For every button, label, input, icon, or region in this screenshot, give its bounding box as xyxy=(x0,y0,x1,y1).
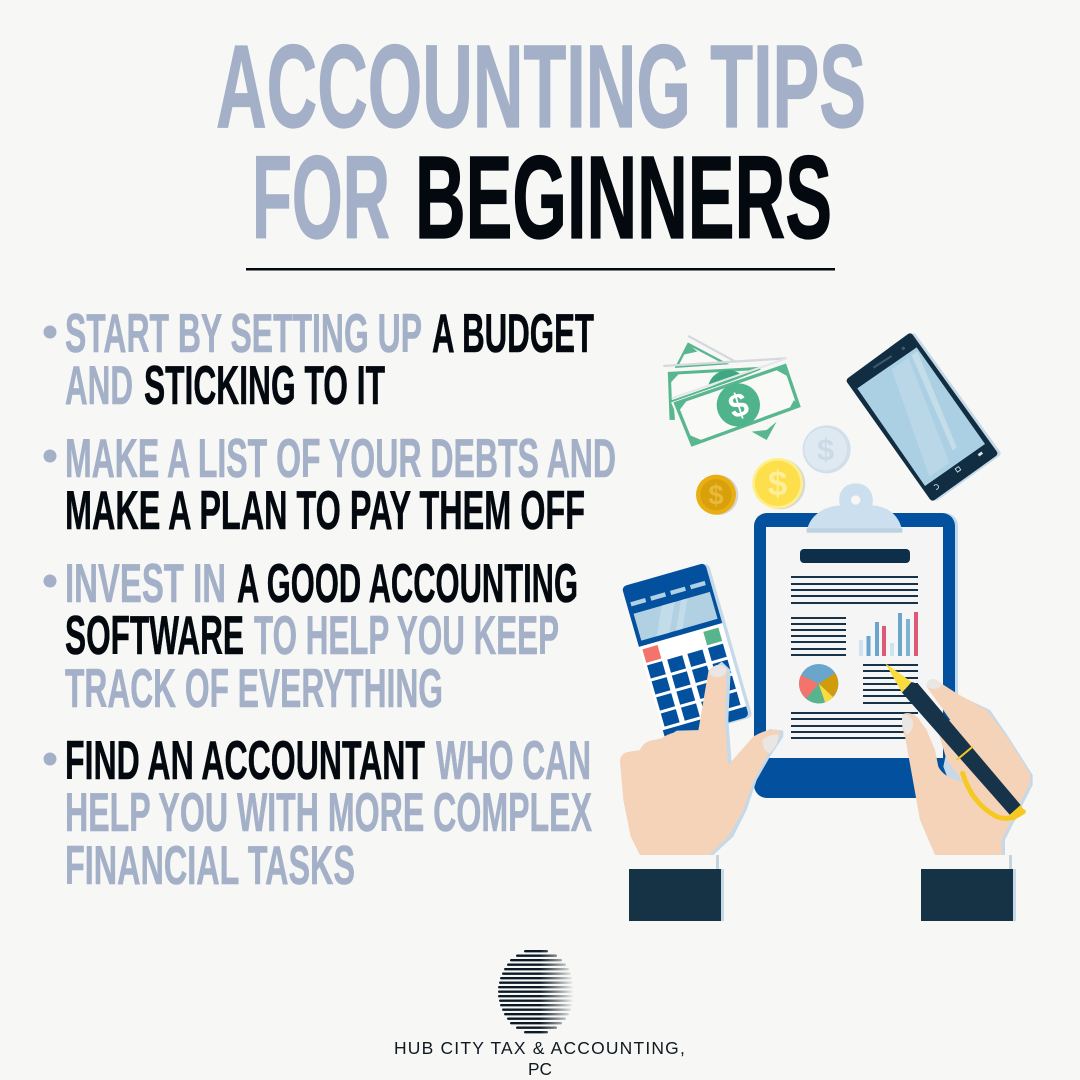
tip 4: accountant: HELP YOU WITH MORE COMPLEX xyxy=(65,781,592,843)
tip 2: debts: MAKE A PLAN TO PAY THEM OFF xyxy=(65,479,585,541)
illustration: clipboard xyxy=(754,483,958,798)
tip 4: accountant: WHO CAN xyxy=(436,729,591,791)
illustration: right hand and pen xyxy=(885,663,1033,855)
title xyxy=(216,21,866,264)
tip 4: accountant xyxy=(44,729,592,896)
tip 3: software: INVEST IN xyxy=(65,552,226,614)
bar chart xyxy=(859,612,918,656)
icon: banknotes xyxy=(663,336,800,447)
tip 3: software: TRACK OF EVERYTHING xyxy=(65,657,443,719)
tip 2: debts: MAKE A LIST OF YOUR DEBTS AND xyxy=(65,427,616,489)
icon: coins xyxy=(696,425,851,515)
icon: coins: $ xyxy=(817,433,834,467)
tip 3: software: SOFTWARE xyxy=(65,604,244,666)
tip 1: budget xyxy=(44,302,594,416)
logo text: HUB CITY TAX & ACCOUNTING, xyxy=(394,1038,686,1058)
tip 1: budget: STICKING TO IT xyxy=(144,354,385,416)
tip 1: budget: A BUDGET xyxy=(432,302,594,364)
tip 4: accountant: FINANCIAL TASKS xyxy=(65,834,355,896)
icon: coins: $ xyxy=(708,479,724,510)
illustration: calculator xyxy=(622,562,753,742)
illustration: right cuff xyxy=(921,855,1016,921)
illustration: left cuff xyxy=(629,855,724,921)
illustration: money, coins and phone xyxy=(663,336,997,515)
illustration: left hand xyxy=(620,662,783,855)
tip 3: software: TO HELP YOU KEEP xyxy=(254,604,559,666)
text lines xyxy=(791,576,918,739)
logo text: PC xyxy=(528,1059,552,1079)
icon: clip xyxy=(807,483,902,533)
tip 3: software xyxy=(44,552,578,719)
icon: pen xyxy=(885,663,1025,821)
tip 2: debts xyxy=(44,427,616,541)
logo text xyxy=(394,1038,686,1079)
logo mark: striped globe xyxy=(498,950,574,1033)
tip 4: accountant: FIND AN ACCOUNTANT xyxy=(65,729,425,791)
tip 1: budget: START BY SETTING UP xyxy=(65,302,422,364)
tip 1: budget: AND xyxy=(65,354,133,416)
icon: banknotes: $ xyxy=(724,386,754,427)
logo xyxy=(394,950,686,1079)
bullet list xyxy=(44,302,616,896)
tip 3: software: A GOOD ACCOUNTING xyxy=(237,552,578,614)
title: FOR xyxy=(252,132,390,264)
icon: smartphone xyxy=(850,337,997,497)
icon: coins: $ xyxy=(768,465,787,504)
pie chart xyxy=(799,664,838,703)
